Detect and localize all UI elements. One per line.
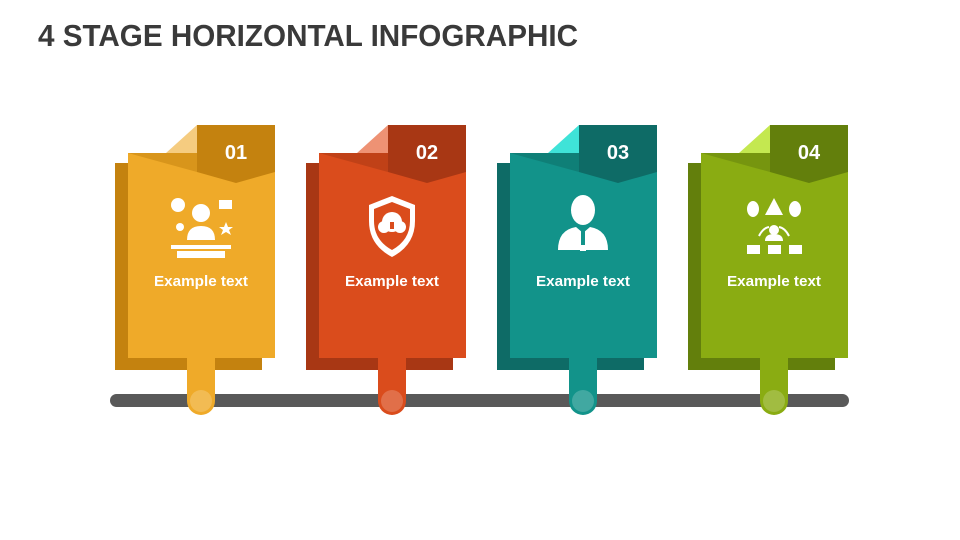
icon: bugs warning network (747, 198, 802, 254)
icon: person at desk (171, 198, 233, 258)
card 04: Example text (727, 273, 821, 290)
card 01: Example text (154, 273, 248, 290)
timeline bar (110, 394, 849, 407)
card 03 (497, 125, 657, 415)
card 01 (115, 125, 275, 415)
title: 4 STAGE HORIZONTAL INFOGRAPHIC (38, 18, 578, 53)
card 04: 04 (798, 142, 821, 164)
icon: businessman (558, 195, 608, 251)
card 02: 02 (416, 142, 438, 164)
card 03: 03 (607, 142, 629, 164)
card 02: Example text (345, 273, 439, 290)
card 02 (306, 125, 466, 415)
card 01: 01 (225, 142, 247, 164)
card 04 (688, 125, 848, 415)
icon: shield with cloud lock (369, 196, 415, 257)
card 03: Example text (536, 273, 630, 290)
